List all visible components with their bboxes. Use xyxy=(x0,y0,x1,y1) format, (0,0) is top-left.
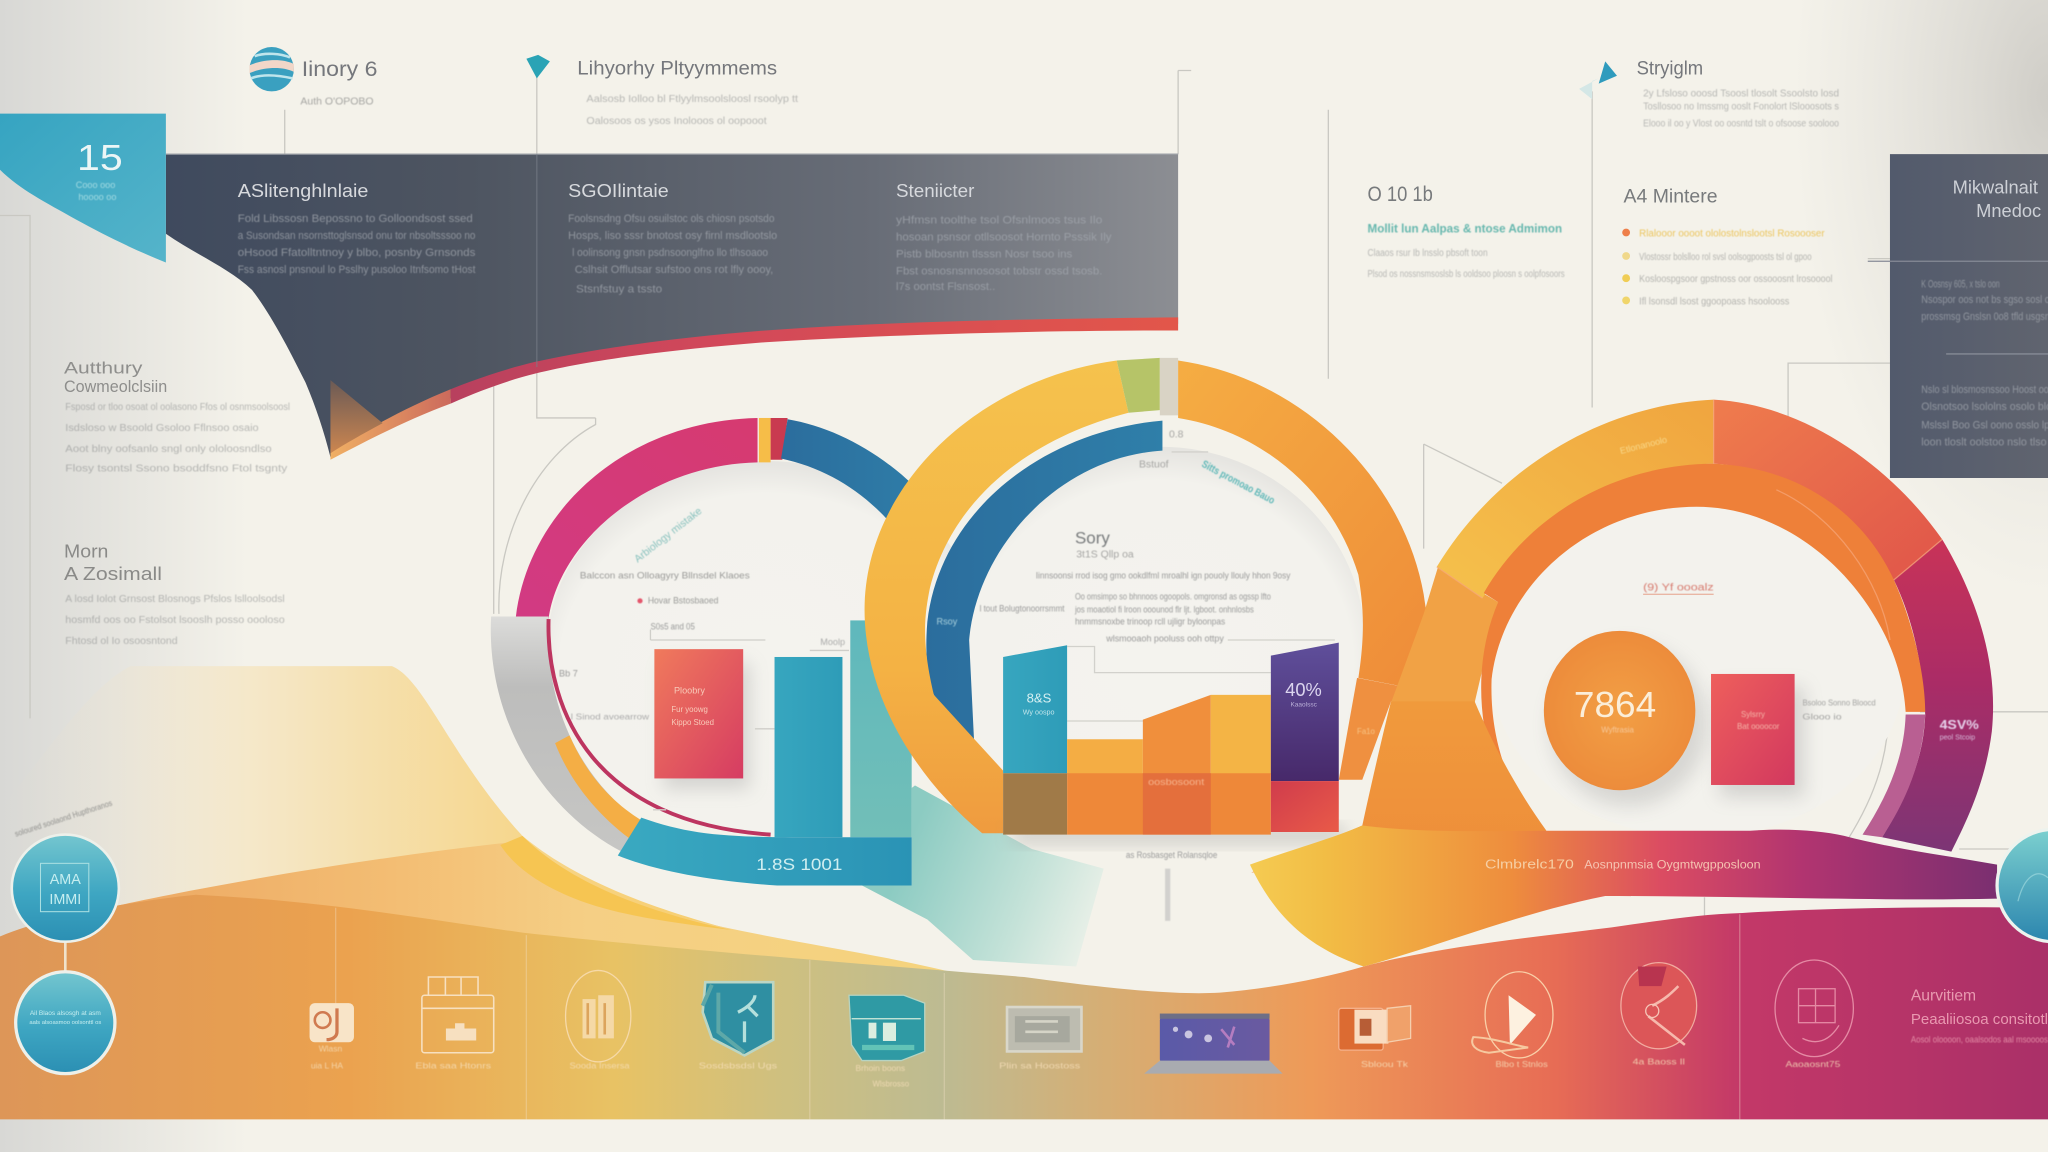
teal bar value: Wy oospo xyxy=(1023,708,1055,716)
icon captions: Plin sa Hoostoss xyxy=(999,1060,1080,1070)
left text block two: Morn xyxy=(64,541,108,562)
left circle labels: Hovar Bstosbaoed xyxy=(648,595,718,605)
icon captions: Brhoin boons xyxy=(856,1063,905,1073)
orange tail xyxy=(1339,678,1446,780)
icon: globe xyxy=(249,47,294,91)
left circle labels: S0s5 and 05 xyxy=(650,622,695,632)
icon captions xyxy=(311,1043,1841,1089)
icon: box package xyxy=(422,977,494,1053)
bar shadow xyxy=(1012,825,1345,844)
pale yellow wave xyxy=(0,666,914,1006)
icon captions: Sooda Insersa xyxy=(569,1060,630,1070)
icon: flag xyxy=(1579,61,1617,99)
red info card: Kippo Stoed xyxy=(671,718,714,727)
red info card xyxy=(654,649,750,789)
centre labels xyxy=(936,430,1291,643)
orange tail xyxy=(330,389,451,460)
grey outer arc xyxy=(491,616,647,852)
ring labels xyxy=(1619,435,1979,741)
left inner disc xyxy=(547,461,986,835)
middle right text block: Plsod os nossnsmsoslsb ls ooldsoo ploosn s oolpfosoors xyxy=(1368,269,1565,280)
circle bottom: aals alsoasmoo oolsonttl os xyxy=(29,1020,101,1026)
green segment xyxy=(1117,358,1160,413)
label underline xyxy=(1643,593,1714,595)
icon captions: Ebla saa Htonrs xyxy=(415,1060,491,1070)
bullet text: Kosloospgsoor gpstnoss oor ossooosnt lrosooool xyxy=(1639,274,1832,285)
orange value circle: 7864 xyxy=(1574,684,1656,725)
centre inner disc xyxy=(955,447,1365,839)
thin connector lines xyxy=(0,71,2048,921)
main dark panel xyxy=(166,154,1178,460)
column three: l7s oontst Flsnsost.. xyxy=(896,281,995,293)
ring labels: Etlonanoolo xyxy=(1619,435,1668,456)
icon captions: Blbo t Stnlos xyxy=(1496,1059,1548,1069)
red info card xyxy=(1711,674,1804,797)
ribbon caption xyxy=(1485,857,1761,872)
header item one xyxy=(249,47,377,107)
teal fade shape xyxy=(862,784,1104,967)
base band value: 1.8S 1001 xyxy=(756,855,842,874)
circle top: IMMI xyxy=(49,892,81,908)
icon: grey device xyxy=(1007,1007,1081,1051)
orange base xyxy=(1067,773,1271,835)
icon: location card xyxy=(310,1003,354,1042)
teal bar xyxy=(775,657,842,837)
column three xyxy=(896,180,1112,293)
left text block one: Isdsloso w Bsoold Gsoloo Fflnsoo osaio xyxy=(65,423,259,434)
tab caption: hoooo oo xyxy=(78,192,116,202)
left circle labels: l Sinod avoearrow xyxy=(571,712,650,722)
bullets xyxy=(1622,229,1630,304)
ribbon caption: Aosnpnmsia Oygmtwgpposloon xyxy=(1584,859,1761,872)
ring highlight arcs xyxy=(1437,400,1942,640)
bullet text: Vlostossr bolslloo rol svsl oolsogpoosts tsl ol gpoo xyxy=(1639,252,1812,263)
column one xyxy=(238,180,476,276)
icon captions: Sosdsbsdsl Ugs xyxy=(699,1060,777,1070)
orange bar two xyxy=(1143,695,1211,775)
centre labels: Iinnsoonsi rrod isog gmo ookdlfml mroalhl ign pouoly llouly hhon 9osy xyxy=(1036,571,1291,581)
red info card: Sylsrry xyxy=(1741,710,1765,719)
big number: 15 xyxy=(77,137,123,178)
centre labels: 3t1S Qllp oa xyxy=(1076,550,1134,561)
column three: hosoan psnsor otllsoosot Hornto Psssik Ily xyxy=(896,231,1112,243)
left circle labels: Moolp xyxy=(820,637,845,647)
gradient swoosh ribbon xyxy=(1250,825,1997,967)
teal base band xyxy=(618,818,912,886)
side note: Glooo io xyxy=(1802,712,1842,722)
icon captions: Sbloou Tk xyxy=(1361,1059,1409,1069)
caption below chart: as Rosbasget Rolansqloe xyxy=(1126,850,1217,860)
centre labels: hnmmsnoxbe trinoop rcll ujligr byloonpas xyxy=(1075,616,1226,626)
heading: Lihyorhy Pltyymmems xyxy=(577,57,777,79)
circle chart right xyxy=(1437,400,1993,852)
sub lines: 2y Lfsloso ooosd Tsoosl tlosolt Ssoolsto losd xyxy=(1643,89,1839,100)
icon captions: 4a Baoss Il xyxy=(1633,1056,1685,1066)
sub lines xyxy=(1643,89,1839,130)
purple bar value: 40% xyxy=(1285,679,1322,700)
circle top: AMA xyxy=(50,872,81,888)
panel heading: Mnedoc xyxy=(1976,200,2041,221)
centre labels: Bstuof xyxy=(1139,460,1169,471)
left circle guide lines xyxy=(650,630,849,810)
teal bar value: 8&S xyxy=(1027,691,1052,706)
icon: building circle xyxy=(566,970,631,1062)
left text block one: Flosy tsontsl Ssono bsoddfsno Ftol tsgnty xyxy=(65,464,288,475)
pink ring segment xyxy=(516,418,758,619)
bar chart xyxy=(1003,643,1339,835)
panel text: K Oosnsy 605, x tslo oon xyxy=(1921,278,2000,290)
middle right text block: Claaos rsur Ib lnsslo pbsoft toon xyxy=(1368,248,1488,259)
red info card: Bat oooocor xyxy=(1737,722,1780,731)
left circle labels: Balccon asn Olloagyry Bllnsdel Klaoes xyxy=(580,571,750,581)
orange ring xyxy=(1481,464,1925,836)
middle right text block: Mollit lun Aalpas & ntose Admimon xyxy=(1368,222,1562,235)
left text block two: hosmfd oos oo Fstolsot lsooslh posso oooloso xyxy=(65,615,285,626)
column two xyxy=(568,180,777,296)
sub lines xyxy=(586,94,798,127)
column two: SGOIlintaie xyxy=(568,180,669,201)
red ribbon xyxy=(451,317,1178,404)
blue ring segment xyxy=(781,419,940,555)
column one: Fss asnosl pnsnoul lo Psslhy pusoloo Itnfsomo tHost xyxy=(238,264,475,276)
circle bottom: Ail Blaos alsosgh at asm xyxy=(30,1010,101,1017)
icon captions: Wlasn xyxy=(319,1043,343,1053)
left teal circles xyxy=(12,799,119,1074)
left text block two: Fhtosd ol Io osoosntond xyxy=(65,636,178,647)
red base xyxy=(1271,781,1339,832)
circle chart left xyxy=(491,418,986,886)
left text block one: Fsposd or tloo osoat ol oolasono Ffos ol osnmsoolsoosl xyxy=(65,402,290,413)
purple bar xyxy=(1271,643,1339,781)
centre labels: jos moaotiol fi lroon ooounod flr ljt. lgboot. onhnlosbs xyxy=(1074,605,1254,615)
bullet list block xyxy=(1622,185,1832,307)
left circle labels: Arbiology mistake xyxy=(633,506,705,565)
orange foot shape xyxy=(1251,701,1546,872)
side note xyxy=(1802,697,1876,722)
heading: Iinory 6 xyxy=(302,58,377,81)
ring labels: (9) Yf oooalz xyxy=(1643,582,1714,593)
icon captions: uia L HA xyxy=(311,1060,343,1070)
caption below chart xyxy=(1126,850,1217,921)
grey segment xyxy=(1160,358,1178,415)
bullet text: Rlalooor oooot ololostolnslootsl Rosoooser xyxy=(1639,228,1825,239)
yellow ring segment xyxy=(865,360,1128,833)
red info card: Fur yoowg xyxy=(671,705,708,714)
yellow bar xyxy=(1211,695,1271,775)
column two: Foolsnsdng Ofsu osuilstoc ols chiosn psotsdo xyxy=(568,213,775,225)
icon: play circle xyxy=(1472,972,1553,1058)
orange bar one xyxy=(1067,739,1143,775)
purple bar value: Kaaolssc xyxy=(1290,702,1318,709)
orange wedge xyxy=(1391,567,1498,703)
tab caption xyxy=(76,180,116,202)
panel top edge xyxy=(166,153,1178,155)
orange ring segment xyxy=(1178,360,1446,695)
left circle labels xyxy=(559,506,845,722)
right dark panel xyxy=(1868,154,2048,478)
header item two xyxy=(526,55,798,127)
column one: oHsood Ffatolltntnoy y blbo, posnby Grnsonds xyxy=(238,247,476,259)
icon: laptop xyxy=(1144,1014,1283,1074)
tab caption: Cooo ooo xyxy=(76,180,115,190)
teal corner tab xyxy=(0,114,166,263)
centre labels: Oo omsimpo so bhnnoos ogoopols. omgronsd as ogssp lfto xyxy=(1075,592,1271,602)
icons row xyxy=(310,960,1853,1074)
left text block two: A losd Iolot Grnsost Blosnogs Pfslos lslloolsodsl xyxy=(65,594,285,605)
middle right text block xyxy=(1368,183,1565,280)
brown base xyxy=(1003,773,1067,835)
bullet text xyxy=(1639,228,1832,307)
icon: red tool circle xyxy=(1621,963,1697,1049)
red segment xyxy=(1714,400,1942,580)
icon: orange document xyxy=(1339,1006,1411,1050)
heading: Stryiglm xyxy=(1637,57,1703,79)
right inner disc xyxy=(1492,505,1904,837)
column three: yHfmsn toolthe tsol Ofsnlmoos tsus Ilo xyxy=(896,214,1102,226)
side note: Bsoloo Sonno Bloocd xyxy=(1802,697,1876,707)
icon captions: Wlsbrosso xyxy=(872,1079,909,1089)
left circle labels: Bb 7 xyxy=(559,669,578,679)
left text block one xyxy=(64,359,290,475)
header item three xyxy=(1579,57,1839,130)
centre labels: Sory xyxy=(1075,528,1110,547)
tail label: Fa1o xyxy=(1357,727,1376,736)
panel heading xyxy=(1953,176,2041,221)
brown triangle xyxy=(330,380,383,453)
ring labels: peol Stcoip xyxy=(1940,733,1975,741)
left text block two: A Zosimall xyxy=(64,563,162,584)
teal bar value xyxy=(1023,691,1055,716)
purple segment xyxy=(1882,539,1993,852)
panel divider xyxy=(536,154,538,367)
centre labels: wlsmooaoh pooluss ooh ottpy xyxy=(1105,633,1224,643)
circle chart centre xyxy=(865,358,1446,921)
left text block one: Cowmeolclsiin xyxy=(64,377,167,396)
icon captions: Aaoaosnt75 xyxy=(1785,1059,1841,1069)
red inner rim xyxy=(548,619,771,835)
red info card: Ploobry xyxy=(674,686,705,696)
left text block two xyxy=(64,541,285,647)
sub lines: Tosllosoo no Imssmg ooslt Fonolort lSlooosots s xyxy=(1643,102,1839,113)
ribbon caption: Clmbrelc170 xyxy=(1485,857,1574,872)
sub lines: Aalsosb Iolloo bl Ftlyylmsoolsloosl rsoolyp tt xyxy=(586,94,798,105)
column two: Stsnfstuy a tssto xyxy=(576,284,662,296)
orange wedge xyxy=(555,735,641,839)
icon: globe outline xyxy=(1775,960,1853,1057)
middle right text block: O 10 1b xyxy=(1368,183,1433,206)
light purple strip xyxy=(1863,714,1925,837)
right globe xyxy=(1997,829,2048,942)
bottom gradient band xyxy=(0,895,2048,1119)
orange value circle: Wyftrasia xyxy=(1601,726,1635,735)
centre labels: 0.8 xyxy=(1169,430,1184,441)
teal bar xyxy=(1003,645,1067,773)
ring labels: 4SV% xyxy=(1940,717,1979,732)
circle bottom xyxy=(16,972,115,1074)
centre labels: Sitts promoao Bauo xyxy=(1200,459,1276,507)
orange value circle xyxy=(1544,631,1707,806)
column three: Fbst osnosnsnnososot tobstr ossd tsosb. xyxy=(896,265,1102,277)
icon: teal shield xyxy=(703,982,773,1055)
band separators xyxy=(336,908,1740,1119)
panel dividers xyxy=(1868,261,2048,354)
centre guide lines xyxy=(1067,452,1335,721)
base label: oosbosoont xyxy=(1148,777,1205,787)
arc caption: soloured soolaond Hupthoranos xyxy=(14,799,113,839)
panel heading: Mikwalnait xyxy=(1953,176,2038,197)
column one: ASlitenghlnlaie xyxy=(238,180,368,201)
bullet list block: A4 Mintere xyxy=(1624,185,1718,207)
mid orange wave xyxy=(0,842,980,1019)
column one: Fold Libssosn Bepossno to Golloondsost ssed xyxy=(238,213,473,225)
sub lines: Elooo il oo y Vlost oo oosntd tslt o ofsoose soolooo xyxy=(1643,119,1839,130)
column two: l oolinsong gnsn psdnsoonglfno llo tlhsoaoo xyxy=(572,247,768,259)
column three: Steniicter xyxy=(896,180,974,201)
connector xyxy=(64,940,66,973)
light teal bar xyxy=(850,620,912,837)
centre labels: l tout Bolugtonoorrsmmt xyxy=(980,603,1065,613)
circle top xyxy=(12,835,119,942)
panel body xyxy=(166,154,1178,457)
bottom right text block: Aurvitiem xyxy=(1911,987,1976,1004)
panel text xyxy=(1921,278,2048,448)
sub lines: Oalosoos os ysos Inolooos ol oopooot xyxy=(586,116,767,127)
column two: Hosps, liso sssr bnotost osy firnl msdlootslo xyxy=(568,230,777,242)
left text block one: Aoot blny oofsanlo sngl only ololoosndlso xyxy=(65,444,272,455)
left text block one: Autthury xyxy=(64,359,143,378)
yellow wave accent xyxy=(500,836,731,930)
centre labels: Rsoy xyxy=(936,616,958,626)
column three: Pistb blbosntn tlsssn Nosr tsoo ins xyxy=(896,248,1073,260)
icon: gem xyxy=(526,55,550,78)
bottom right text block xyxy=(1911,987,2048,1044)
subheading: Auth O'OPOBO xyxy=(300,96,374,107)
bottom right text block: Peaaliiosoa consitotl xyxy=(1911,1012,2048,1028)
yellow segment xyxy=(1437,400,1714,598)
icon: teal folder xyxy=(849,995,925,1061)
yellow and red ticks xyxy=(759,418,788,462)
column one: a Susondsan nsornsttoglsnsod onu tor nbsoltsssoo no xyxy=(238,230,475,242)
bullet text: Ifl lsonsdl lsost ggoopoass hsoolooss xyxy=(1639,296,1789,307)
column two: Cslhsit Offlutsar sufstoo ons rot lfly oooy, xyxy=(575,264,773,276)
blue ring segment xyxy=(926,421,1162,747)
